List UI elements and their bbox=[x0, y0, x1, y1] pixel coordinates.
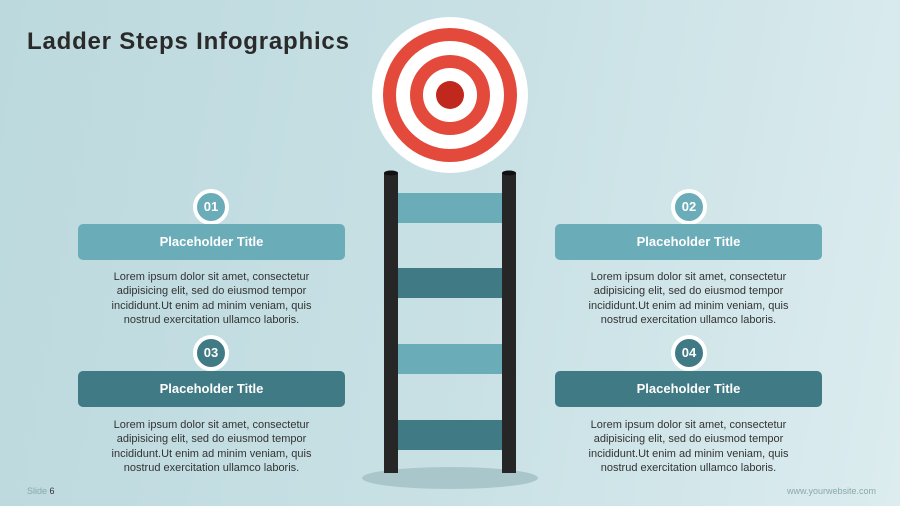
panel: step 03: incididunt.Ut enim ad minim veniam, quis bbox=[112, 448, 311, 460]
panel: step 01: Placeholder Title bbox=[160, 234, 263, 249]
panel: step 04: 04 bbox=[682, 345, 696, 360]
panel: step 03: Placeholder Title bbox=[160, 381, 263, 396]
panel: step 01 bbox=[78, 189, 345, 326]
panel: step 02: adipisicing elit, sed do eiusmod tempor bbox=[594, 285, 783, 297]
panel: step 01: 01 bbox=[204, 199, 218, 214]
rails bbox=[384, 170, 516, 473]
panel: step 04: adipisicing elit, sed do eiusmod tempor bbox=[594, 433, 783, 445]
panel: step 02 bbox=[555, 189, 822, 326]
panel: step 02: Lorem ipsum dolor sit amet, consectetur bbox=[591, 271, 786, 283]
panel: step 01: Lorem ipsum dolor sit amet, consectetur bbox=[114, 271, 309, 283]
ladder shadow bbox=[362, 467, 538, 489]
panel: step 02: Placeholder Title bbox=[637, 234, 740, 249]
panel: step 02: nostrud exercitation ullamco laboris. bbox=[601, 314, 776, 326]
panel: step 03 bbox=[78, 335, 345, 474]
panel: step 02: 02 bbox=[682, 199, 696, 214]
footer: slide number: Slide 6 bbox=[27, 486, 55, 496]
panel: step 04: Placeholder Title bbox=[637, 381, 740, 396]
panel: step 03: Lorem ipsum dolor sit amet, consectetur bbox=[114, 419, 309, 431]
footer: website: www.yourwebsite.com bbox=[787, 486, 876, 496]
panel: step 04: nostrud exercitation ullamco laboris. bbox=[601, 462, 776, 474]
panel: step 01: incididunt.Ut enim ad minim veniam, quis bbox=[112, 300, 311, 312]
panel: step 04: incididunt.Ut enim ad minim veniam, quis bbox=[589, 448, 788, 460]
icon: target bbox=[372, 17, 528, 173]
panel: step 01: nostrud exercitation ullamco laboris. bbox=[124, 314, 299, 326]
rungs bbox=[398, 193, 502, 450]
panel: step 03: 03 bbox=[204, 345, 218, 360]
panel: step 03: nostrud exercitation ullamco laboris. bbox=[124, 462, 299, 474]
title: Ladder Steps Infographics bbox=[27, 28, 350, 55]
panel: step 03: adipisicing elit, sed do eiusmod tempor bbox=[117, 433, 306, 445]
panel: step 04: Lorem ipsum dolor sit amet, consectetur bbox=[591, 419, 786, 431]
panel: step 02: incididunt.Ut enim ad minim veniam, quis bbox=[589, 300, 788, 312]
panel: step 01: adipisicing elit, sed do eiusmod tempor bbox=[117, 285, 306, 297]
panel: step 04 bbox=[555, 335, 822, 474]
